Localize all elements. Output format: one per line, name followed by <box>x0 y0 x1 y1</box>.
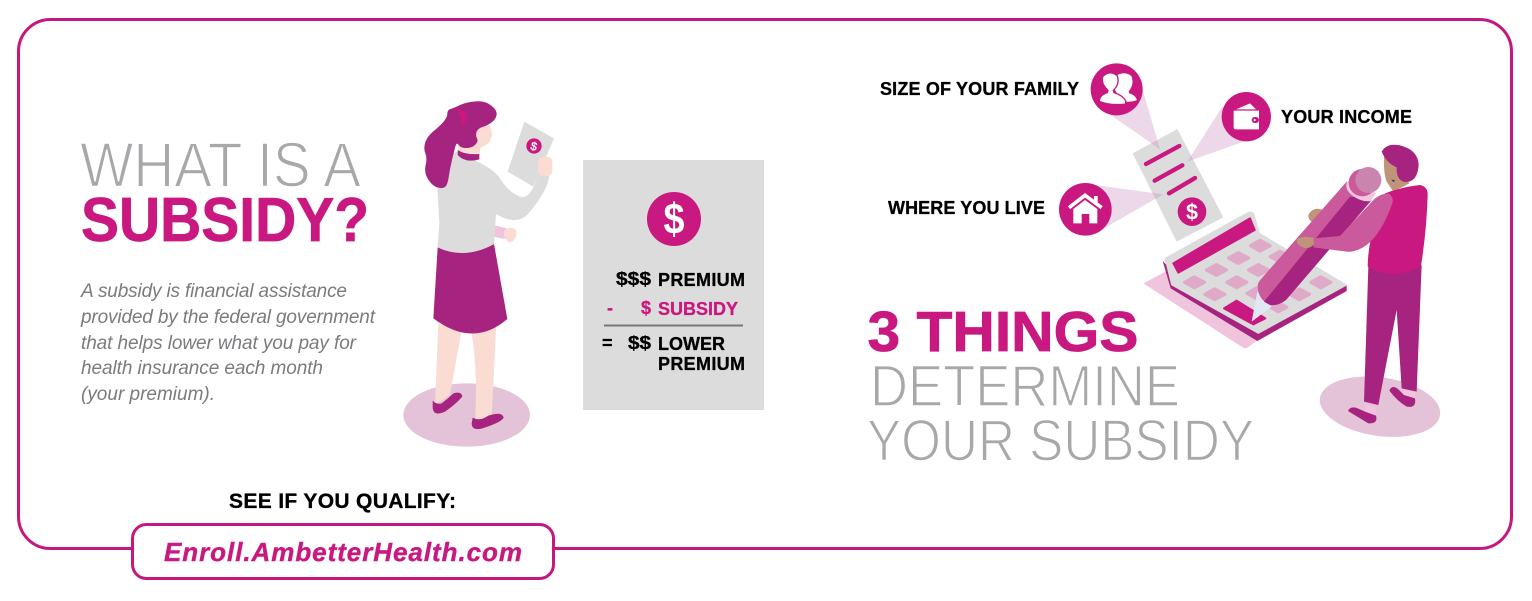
panel: what is a subsidy text <box>80 130 376 405</box>
illustration: receipt with three factors: $ <box>1186 200 1198 225</box>
factor: size of your family <box>880 63 1143 115</box>
definition text block: that helps lower what you pay for <box>81 333 357 354</box>
illustration: man holding a giant pencil <box>1252 145 1444 444</box>
heading: 3 things determine your subsidy: YOUR SUBSIDY <box>867 408 1254 474</box>
subsidy row <box>607 298 738 319</box>
label: size of your family: SIZE OF YOUR FAMILY <box>880 79 1079 99</box>
enroll link button: Enroll.AmbetterHealth.com <box>164 537 522 567</box>
label: your income: YOUR INCOME <box>1281 107 1412 127</box>
heading: 3 things determine your subsidy <box>867 300 1254 474</box>
illustration: woman reading a document: $ <box>529 139 539 154</box>
icon: house <box>1059 183 1112 236</box>
man lower body <box>1316 265 1444 444</box>
icon: dollar coin <box>647 192 701 246</box>
heading: what is a subsidy: WHAT IS A <box>80 130 361 200</box>
panel: premium calculation <box>583 160 764 410</box>
call to action <box>132 490 554 578</box>
factor: your income <box>1222 92 1412 141</box>
premium row: PREMIUM <box>658 270 745 290</box>
definition text block: A subsidy is financial assistance <box>80 281 347 302</box>
icon: family <box>1091 63 1143 115</box>
subsidy row: $ <box>641 298 651 318</box>
lower premium row: $$ <box>628 333 651 353</box>
illustration: receipt with three factors <box>1095 90 1248 242</box>
premium row <box>616 269 745 290</box>
icon: dollar coin: $ <box>664 195 684 244</box>
lower premium row: PREMIUM <box>658 354 745 374</box>
heading: what is a subsidy: SUBSIDY? <box>81 186 369 255</box>
label: where you live: WHERE YOU LIVE <box>888 198 1045 218</box>
definition text block: provided by the federal government <box>80 307 376 328</box>
definition text block: health insurance each month <box>81 358 323 379</box>
definition text block: (your premium). <box>81 384 215 405</box>
illustration: woman reading a document <box>403 101 554 447</box>
lower premium row: = <box>602 333 613 353</box>
man upper body and pencil <box>1252 145 1428 322</box>
enroll link button <box>132 524 554 578</box>
lower premium row: LOWER <box>658 334 725 354</box>
factor: where you live <box>888 183 1112 236</box>
heading: what is a subsidy <box>80 130 369 255</box>
lower premium row <box>602 333 745 374</box>
subsidy row: SUBSIDY <box>658 299 738 319</box>
definition text block <box>80 281 376 405</box>
heading: 3 things determine your subsidy: 3 THINGS <box>868 300 1138 364</box>
qualify heading: SEE IF YOU QUALIFY: <box>229 490 456 513</box>
subsidy row: - <box>607 298 613 318</box>
premium row: $$$ <box>616 269 651 289</box>
heading: 3 things determine your subsidy: DETERMINE <box>870 354 1180 419</box>
icon: wallet <box>1222 92 1271 141</box>
illustration: calculator <box>1143 212 1347 348</box>
